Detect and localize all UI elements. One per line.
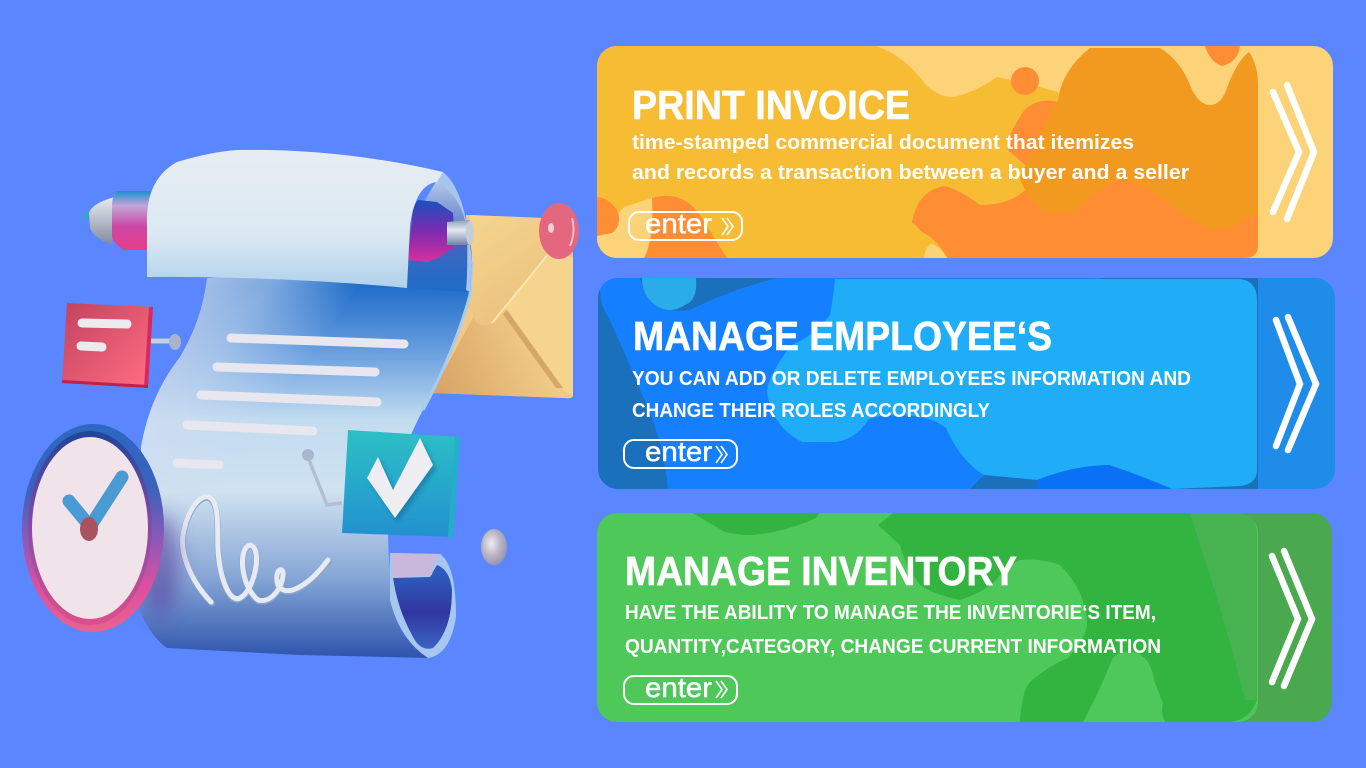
enter button: [624, 436, 737, 468]
enter button: enter: [645, 208, 712, 239]
document text lines: [177, 338, 404, 465]
paper sheet: [140, 262, 472, 658]
illustration: invoice scroll: [22, 150, 579, 658]
enter button: [629, 208, 742, 240]
paper roll front: [147, 150, 443, 288]
icon: note card: [62, 303, 181, 388]
icon: clock: [22, 424, 164, 632]
paper bottom curl: [390, 553, 456, 658]
panel: manage employees: [598, 278, 1335, 489]
description line 2: CHANGE THEIR ROLES ACCORDINGLY: [632, 400, 991, 422]
heading: PRINT INVOICE: [632, 82, 910, 128]
panel: print invoice: [597, 46, 1333, 258]
roll inner and pen cap: [407, 172, 474, 292]
description: time-stamped commercial document that itemizes: [632, 132, 1134, 154]
panel: manage inventory: [597, 511, 1332, 736]
icon: envelope: [432, 215, 573, 398]
arrow: chevrons: [1276, 317, 1316, 450]
arrow: chevrons: [1273, 85, 1314, 219]
heading: MANAGE INVENTORY: [625, 548, 1017, 594]
enter button: [624, 672, 737, 704]
enter button: enter: [645, 672, 712, 703]
icon: silver ball: [481, 529, 507, 565]
card artwork: [597, 46, 1333, 258]
description line 2: QUANTITY,CATEGORY, CHANGE CURRENT INFORMATION: [625, 636, 1161, 658]
heading: MANAGE EMPLOYEE‘S: [633, 313, 1052, 359]
card artwork: [598, 278, 1335, 489]
icon: push pin: [539, 203, 579, 259]
description: HAVE THE ABILITY TO MANAGE THE INVENTORIE‘S ITEM,: [625, 602, 1156, 624]
card artwork: [597, 511, 1332, 736]
signature: [182, 497, 329, 603]
arrow: chevrons: [1272, 551, 1312, 686]
pen tip behind the roll: [80, 191, 153, 250]
clock shadow: [142, 513, 178, 617]
icon: check card: [302, 430, 460, 537]
description: YOU CAN ADD OR DELETE EMPLOYEES INFORMATION AND: [632, 368, 1191, 390]
enter button: enter: [645, 436, 712, 467]
description line 2: and records a transaction between a buyer and a seller: [632, 162, 1189, 184]
